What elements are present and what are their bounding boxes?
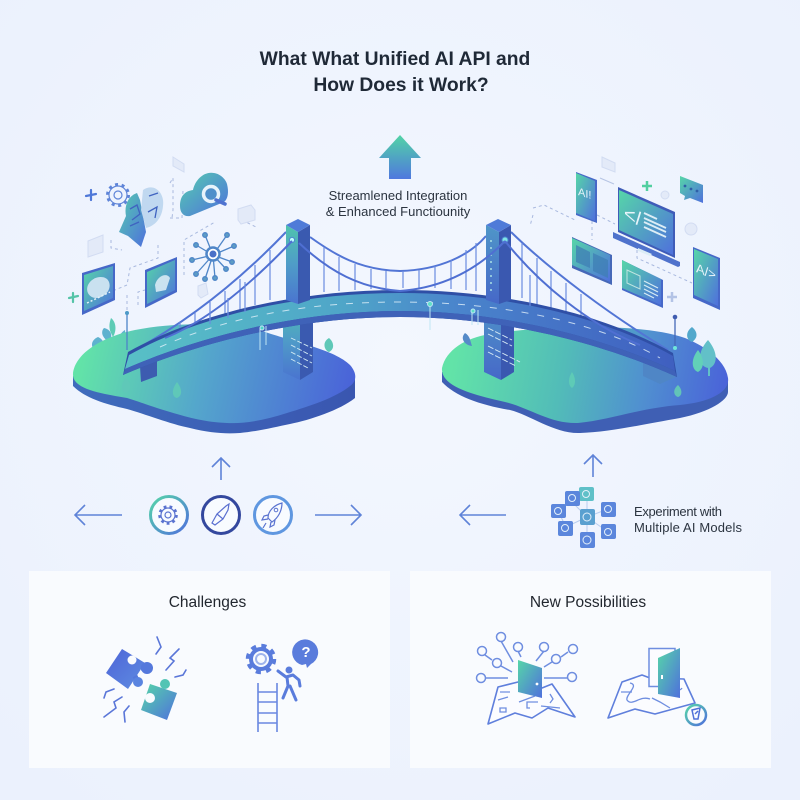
icon: pen circle <box>202 496 240 534</box>
heading: new possibilities: New Possibilities <box>530 594 646 611</box>
icon: code laptop <box>613 187 680 267</box>
right tower upper <box>486 219 511 304</box>
right tech icon cluster <box>463 157 720 397</box>
right tower lower <box>484 300 520 380</box>
left island details <box>122 311 333 398</box>
text: streamlined integration <box>326 188 471 219</box>
deck surface <box>125 293 675 371</box>
left abutment <box>140 360 157 382</box>
title <box>260 49 530 96</box>
arrow: right <box>315 505 361 525</box>
icon: rocket circle <box>254 496 292 534</box>
text: streamlined integration: & Enhanced Functiounity <box>326 204 471 219</box>
bridge <box>123 219 678 384</box>
connector dashes <box>111 178 258 310</box>
deck glowing posts <box>260 302 478 350</box>
right island <box>442 327 728 433</box>
icon: code tablet: A/> <box>696 260 716 283</box>
right abutment <box>643 362 678 384</box>
icon: plants <box>92 318 125 354</box>
title: What What Unified AI API and <box>260 49 530 70</box>
left tech icon cluster <box>69 157 258 354</box>
left island <box>73 324 355 433</box>
icon: window one <box>572 237 612 285</box>
icon: plus marks <box>642 181 677 302</box>
left tower lower <box>283 300 313 380</box>
icon: neural network node <box>190 233 236 281</box>
icon: brain head <box>119 187 163 247</box>
icon: gear, ladder, person and question: ? <box>301 644 311 661</box>
icon: chip tablet <box>145 257 177 308</box>
icon: gear circle <box>150 496 188 534</box>
icon: lamp post <box>673 315 677 350</box>
arrow: left <box>75 505 122 525</box>
icon: AI phone: AI! <box>578 186 591 202</box>
text: experiment: Multiple AI Models <box>634 520 742 535</box>
faint background icons <box>88 157 255 298</box>
icon: brain tablet <box>82 263 115 315</box>
deck lane marks <box>160 302 660 358</box>
arrow row: left group <box>75 458 361 534</box>
front hangers <box>210 275 530 324</box>
icon: map with door and nodes <box>476 632 578 724</box>
icon: gear <box>108 184 128 206</box>
icon: code tablet <box>693 247 720 310</box>
text: experiment: Experiment with <box>634 504 722 519</box>
left tower upper <box>286 219 310 304</box>
icon: plus marks <box>69 190 96 302</box>
icon: AI phone <box>576 172 597 223</box>
faint background icons <box>600 157 697 235</box>
icon: broken puzzle <box>104 637 186 722</box>
icon: code laptop: </ <box>624 202 641 231</box>
arrow: up <box>584 455 602 477</box>
front cables <box>165 241 640 345</box>
icon: trees <box>463 327 716 397</box>
icon: small trees <box>122 338 333 398</box>
panel: new possibilities <box>410 571 771 768</box>
icon: window two <box>622 260 663 308</box>
arrow: up <box>212 458 230 480</box>
heading: challenges: Challenges <box>169 594 247 611</box>
back hangers <box>180 243 581 336</box>
back cables <box>135 232 668 350</box>
text: streamlined integration: Streamlened Integration <box>329 188 467 203</box>
connector dashes <box>530 205 692 283</box>
icon: map with open door and badge <box>608 648 706 725</box>
panel: challenges <box>29 571 390 768</box>
arrow: left <box>460 505 506 525</box>
icon: large up arrow <box>379 135 421 179</box>
icon: model cluster <box>551 487 616 548</box>
deck underside <box>123 311 677 377</box>
title: How Does it Work? <box>313 75 489 96</box>
deck rail <box>123 290 677 377</box>
arrow row: right group <box>460 455 742 548</box>
icon: chat bubble <box>680 176 703 203</box>
icon: cloud with magnifier <box>180 173 228 216</box>
icon: gear, ladder, person and question <box>248 639 318 732</box>
icon: lamp post <box>125 311 129 350</box>
text: experiment <box>634 504 742 535</box>
